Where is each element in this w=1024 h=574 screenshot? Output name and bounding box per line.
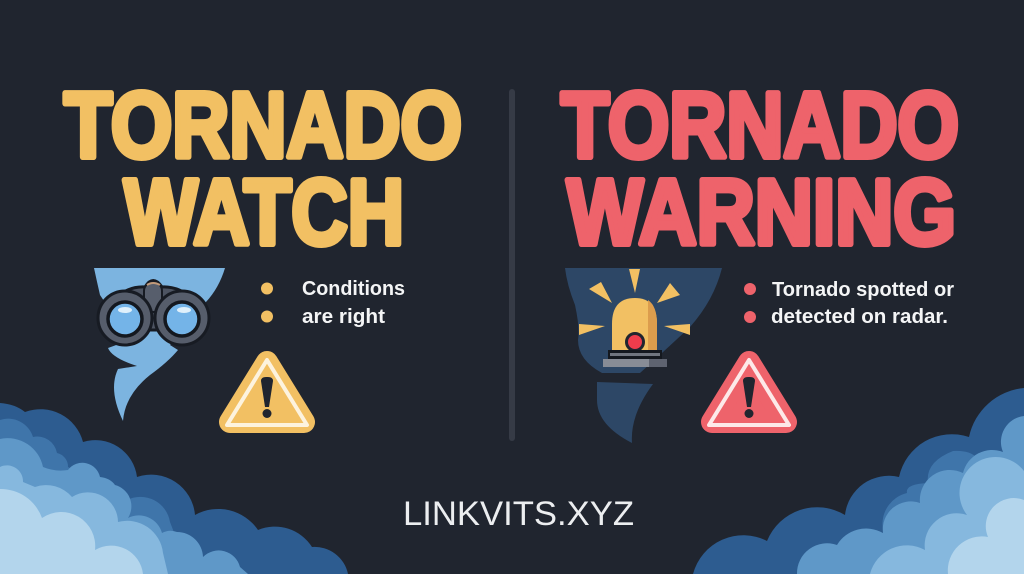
icon: tornado with binoculars (94, 268, 225, 421)
footer url: LINKVITS.XYZ (403, 495, 634, 533)
text: warning conditions (771, 279, 954, 328)
icon: yellow warning triangle (227, 360, 307, 425)
heading: tornado watch: WATCH (124, 160, 404, 264)
heading: tornado watch (64, 73, 462, 264)
clouds: bottom left (0, 403, 348, 574)
heading: tornado watch: TORNADO (64, 73, 462, 177)
icon: red warning triangle (709, 360, 789, 425)
bullets: watch (261, 282, 273, 322)
text: watch conditions: are right (302, 306, 385, 328)
text: watch conditions (302, 278, 405, 328)
bullets: warning (744, 283, 756, 323)
heading: tornado warning: WARNING (567, 160, 956, 264)
clouds: bottom right (693, 388, 1024, 574)
icon: dark tornado with alarm siren (565, 268, 722, 443)
text: watch conditions: Conditions (302, 278, 405, 300)
text: warning conditions: Tornado spotted or (772, 279, 954, 301)
center divider (509, 89, 515, 441)
heading: tornado warning: TORNADO (561, 73, 959, 177)
text: warning conditions: detected on radar. (771, 306, 948, 328)
heading: tornado warning (561, 73, 959, 264)
binoculars (98, 280, 209, 345)
alarm siren (579, 269, 690, 367)
